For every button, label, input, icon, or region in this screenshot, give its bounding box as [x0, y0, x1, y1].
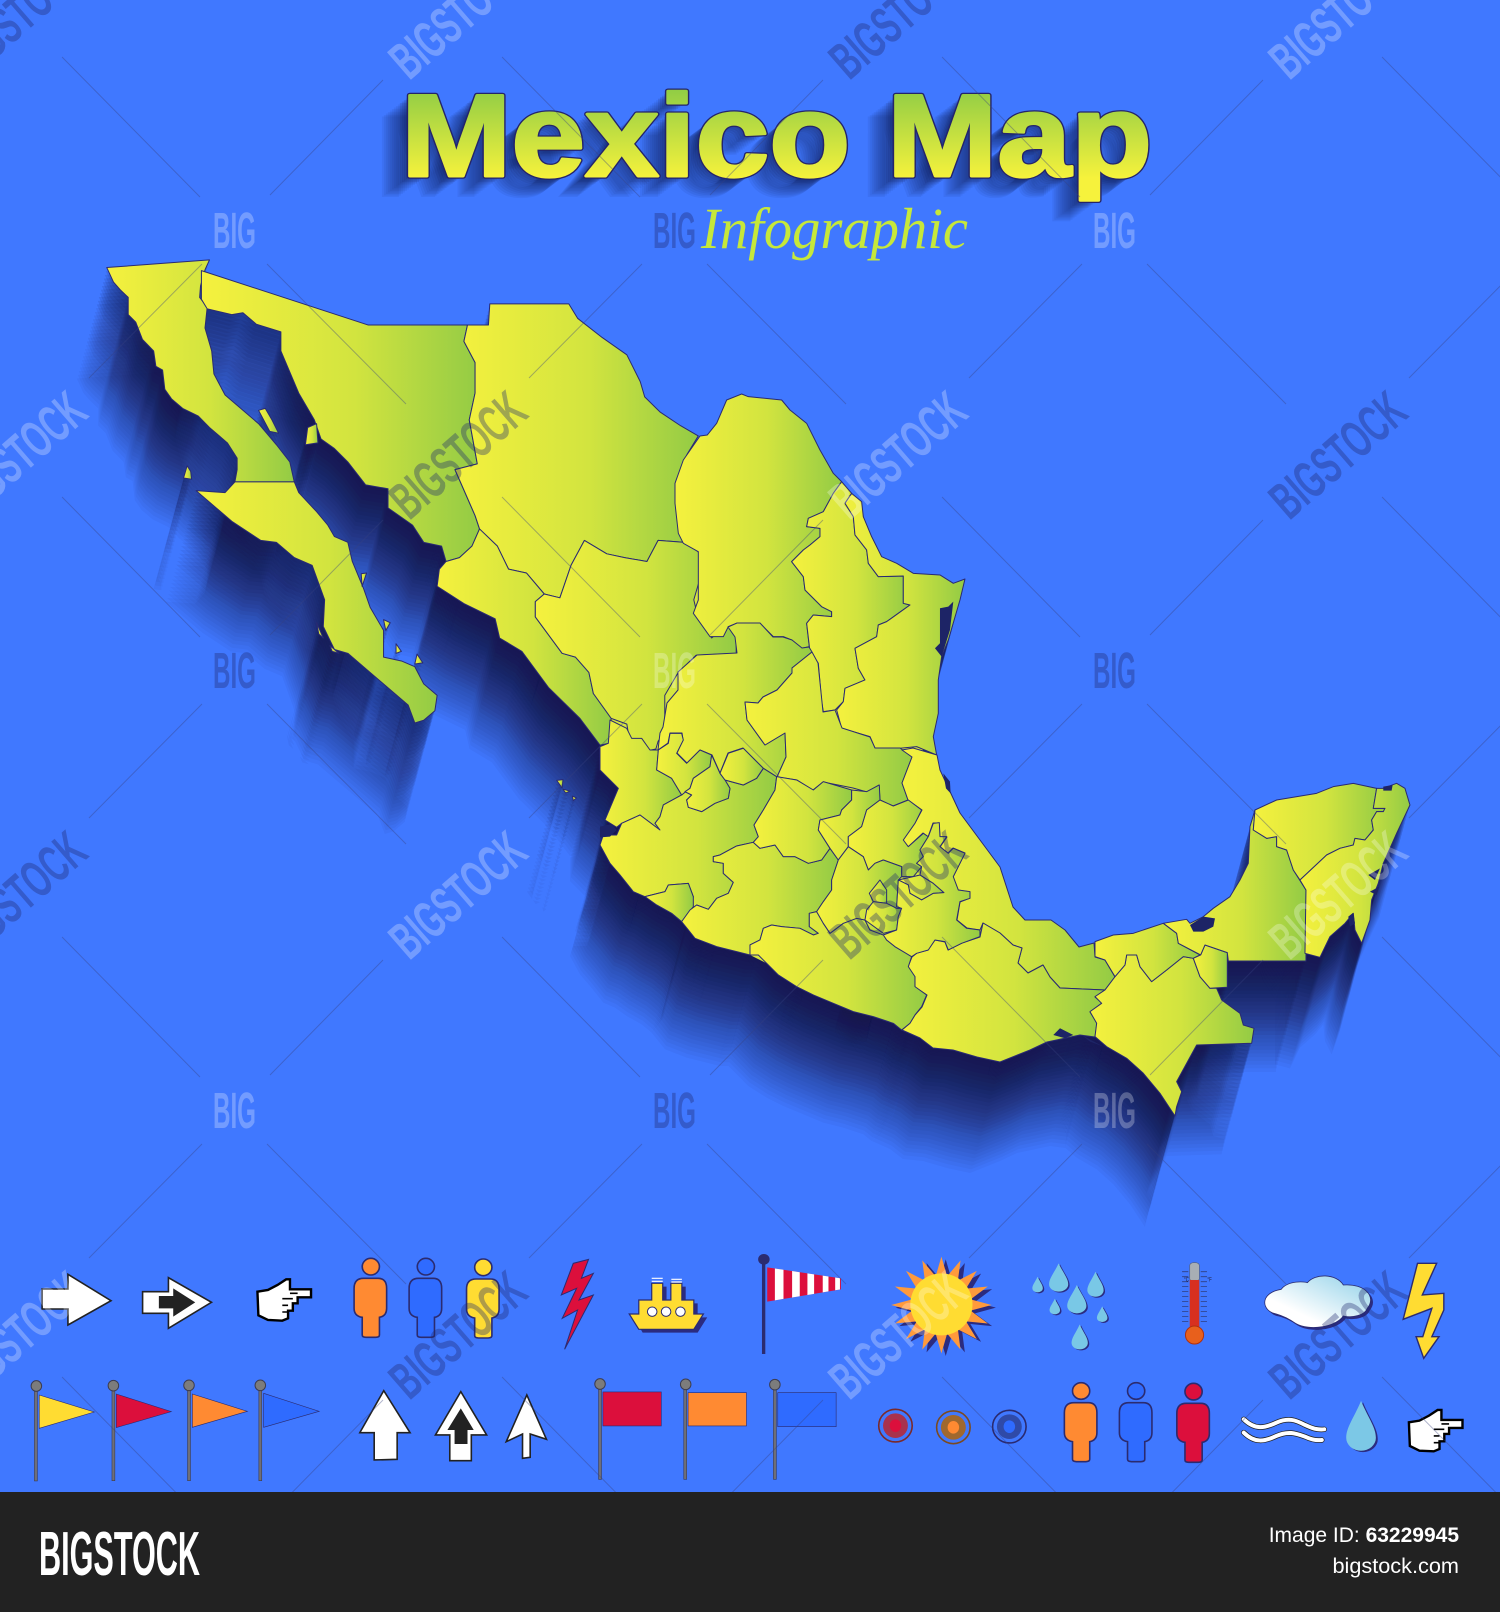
icon: yellow pennant flag	[31, 1381, 94, 1481]
icon: pointing hand	[1409, 1410, 1462, 1451]
state: Aguascalientes	[720, 748, 763, 785]
dark watermarks: BIG	[1093, 642, 1136, 699]
central states in page coordinates	[658, 623, 1115, 1062]
icon: pointing hand	[257, 1279, 311, 1321]
icon: sun	[891, 1257, 996, 1356]
title text: Mexico Map	[401, 70, 1152, 201]
state: Puebla	[883, 823, 980, 957]
state: Baja California Sur	[196, 482, 437, 723]
icon: outlined arrow right	[143, 1278, 211, 1328]
state: Zacatecas	[658, 623, 812, 777]
footer site name: bigstock.com	[1332, 1553, 1459, 1578]
state: Quintana Roo	[1300, 783, 1410, 957]
state: Oaxaca	[902, 923, 1105, 1062]
state: Tamaulipas	[837, 493, 965, 755]
southeast states	[1090, 783, 1410, 1116]
light watermarks: BIG	[1093, 202, 1136, 259]
icon: thermometer	[1182, 1263, 1212, 1344]
state: Veracruz	[902, 748, 1115, 990]
icon: outlined arrow up	[435, 1392, 487, 1461]
islands	[184, 408, 576, 801]
light watermarks: BIGSTOCK	[379, 821, 538, 970]
northeast states	[675, 394, 965, 755]
icon: blue person	[1119, 1383, 1152, 1462]
icon: orange rectangular flag	[680, 1379, 746, 1479]
icon: water drop	[1346, 1401, 1378, 1452]
state: Jalisco north lobes	[657, 733, 712, 795]
state: Baja California	[107, 260, 294, 482]
icon: red person	[1177, 1383, 1209, 1462]
icon: white arrow up	[360, 1391, 410, 1460]
central Pacific states	[600, 720, 980, 1030]
icon: orange person	[354, 1258, 387, 1337]
state: Queretaro	[818, 785, 880, 860]
title outline	[401, 70, 1152, 201]
icon row: right half	[758, 1254, 1462, 1479]
icon: orange target	[937, 1411, 970, 1444]
title long shadow	[373, 72, 1150, 222]
state: Coahuila	[675, 394, 842, 648]
lagoons	[600, 602, 1393, 1047]
state: Durango	[535, 540, 736, 751]
state: Hidalgo	[848, 800, 928, 877]
state: Nayarit	[600, 720, 682, 830]
icon: blue pennant flag	[255, 1380, 319, 1481]
icon: thermometer: °F	[1207, 1277, 1212, 1284]
map long shadow	[77, 264, 1409, 1227]
dark watermarks: BIGSTOCK	[379, 381, 538, 530]
state: Campeche	[1163, 810, 1306, 961]
icon: white arrow right	[42, 1274, 111, 1325]
mainland backing under state borders	[460, 440, 1110, 1055]
icon: red pennant flag	[108, 1380, 171, 1481]
icon row: top row and bottom row, left half	[31, 1258, 746, 1481]
footer bar: BIGSTOCK	[39, 1520, 200, 1589]
state: Tlaxcala	[898, 875, 944, 900]
state: Tabasco east lobe	[1193, 945, 1227, 988]
state: Guanajuato	[753, 777, 852, 863]
icon: yellow person	[467, 1259, 499, 1338]
icon: orange person	[1064, 1383, 1097, 1462]
state: Michoacan	[682, 842, 838, 955]
state: Sinaloa	[437, 529, 611, 745]
state: Morelos	[865, 902, 902, 933]
icon: blue rectangular flag	[770, 1379, 836, 1479]
icon: ship	[629, 1278, 707, 1333]
northwest states	[107, 260, 736, 801]
state: Chiapas	[1090, 955, 1254, 1116]
icon: blue person	[409, 1258, 442, 1337]
light watermarks: BIG	[653, 642, 696, 699]
state: San Luis Potosi	[745, 652, 912, 806]
title: Mexico Map	[373, 70, 1152, 222]
states	[107, 260, 1410, 1116]
icon: waves	[1244, 1419, 1324, 1440]
light watermarks: BIGSTOCK	[819, 1261, 978, 1410]
subtitle: Infographic: Infographic	[700, 196, 968, 261]
state: Colima	[645, 883, 693, 922]
dark watermarks: BIGSTOCK	[819, 821, 978, 970]
dark watermarks: BIG	[213, 642, 256, 699]
footer bar	[0, 1492, 1500, 1612]
light watermarks: BIG	[1093, 1082, 1136, 1139]
state: Yucatan	[1253, 783, 1385, 880]
icon: red target	[879, 1409, 912, 1442]
icon: thermometer: °C	[1184, 1277, 1189, 1284]
icon: cursor arrow	[506, 1395, 546, 1458]
state: Zacatecas south lobe	[685, 755, 730, 812]
icon: yellow lightning	[1403, 1263, 1444, 1358]
icon: red rectangular flag	[595, 1379, 661, 1479]
map of Mexico	[77, 260, 1410, 1227]
icon: orange pennant flag	[184, 1380, 247, 1481]
state: Jalisco	[600, 768, 777, 910]
state: Sonora	[201, 271, 480, 561]
icon: raindrops	[1032, 1263, 1109, 1350]
state: Tabasco	[1095, 923, 1200, 982]
icon: cloud	[1265, 1276, 1373, 1330]
light watermarks: BIGSTOCK	[819, 381, 978, 530]
state: Nuevo Leon	[792, 482, 910, 712]
state: Ciudad de Mexico	[869, 880, 887, 903]
state: Mexico	[817, 847, 902, 935]
light watermarks: BIG	[213, 1082, 256, 1139]
dark watermarks: BIG	[653, 1082, 696, 1139]
footer image id: Image ID: 63229945	[1269, 1524, 1459, 1547]
dark watermarks: BIGSTOCK	[379, 1261, 538, 1410]
light watermarks: BIG	[213, 202, 256, 259]
icon: windsock	[758, 1254, 841, 1354]
icon: blue target	[993, 1410, 1026, 1443]
state: Chihuahua	[455, 304, 698, 598]
icon: red lightning	[561, 1259, 593, 1349]
dark watermarks: BIG	[653, 202, 696, 259]
state: Guerrero	[750, 912, 927, 1030]
